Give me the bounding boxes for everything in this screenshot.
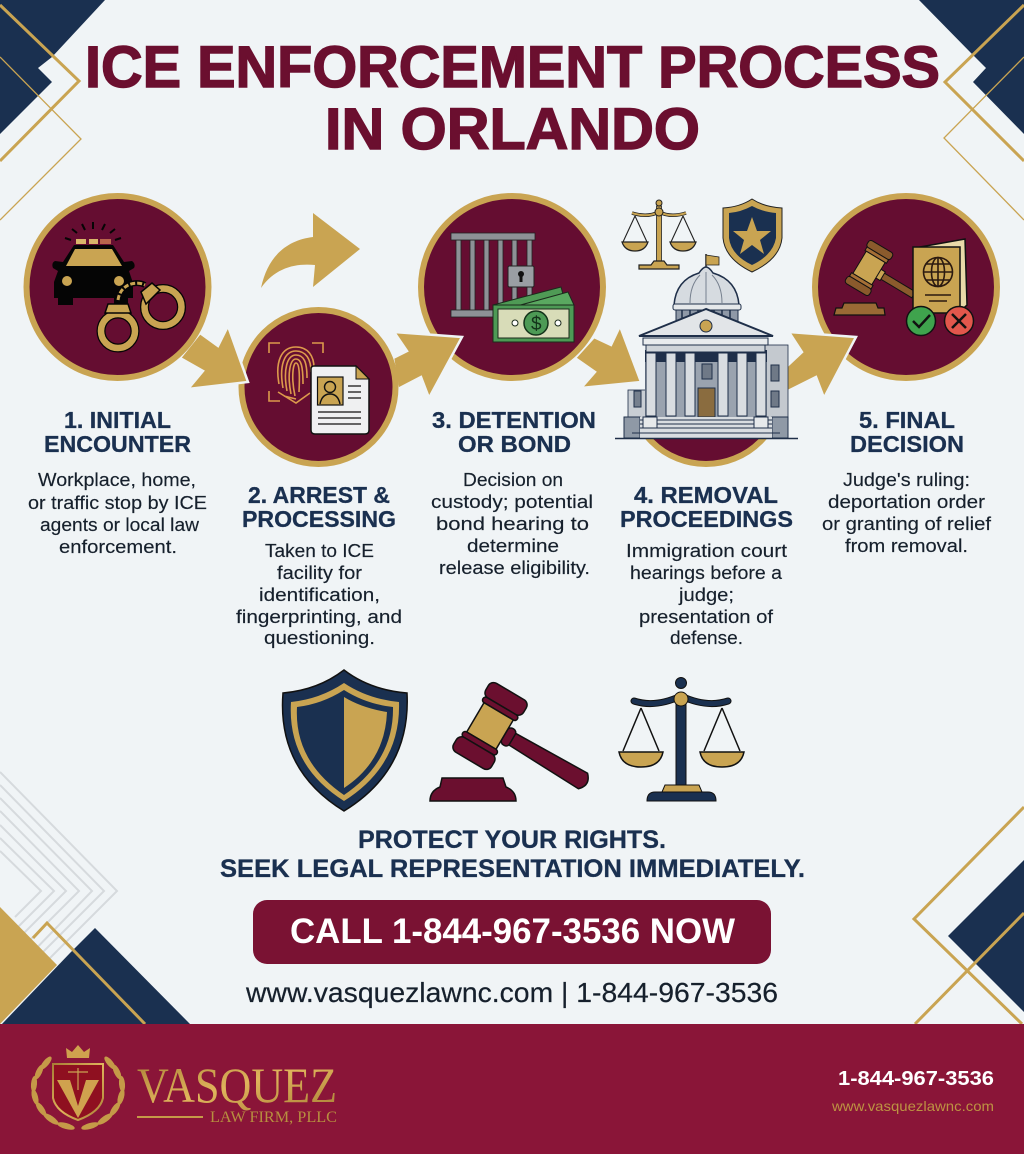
- icon: fingerprint: [269, 343, 323, 403]
- icon: x mark badge: [944, 306, 974, 336]
- step 4 text: Immigration court: [626, 540, 787, 561]
- step 2 text: questioning.: [264, 627, 375, 648]
- website and phone line: www.vasquezlawnc.com | 1-844-967-3536: [245, 977, 778, 1008]
- step 1 text: ENCOUNTER: [44, 431, 191, 457]
- step 5 text: Judge's ruling:: [843, 469, 970, 490]
- step 4 text: defense.: [670, 627, 743, 648]
- arrow: curved arrow above step 2: [261, 213, 360, 288]
- facade wall: [645, 350, 767, 418]
- call button: CALL 1-844-967-3536 NOW: [290, 912, 735, 951]
- title: ICE ENFORCEMENT PROCESS: [85, 35, 940, 100]
- step 4 text: [620, 482, 793, 648]
- step 5 text: from removal.: [845, 535, 968, 556]
- decoration: bottom-left corner: [0, 772, 190, 1024]
- step 5 text: [822, 407, 992, 556]
- icon: scales of justice, top: [622, 200, 696, 269]
- step 5 circle with gavel and passport icon: [815, 196, 997, 378]
- step 1 text: or traffic stop by ICE: [28, 492, 207, 513]
- step 3 text: Decision on: [463, 469, 563, 490]
- icon: large gavel: [430, 680, 607, 818]
- step 1 text: enforcement.: [59, 536, 177, 557]
- icon: identity document: [311, 366, 369, 434]
- icon: gavel: [844, 239, 926, 316]
- step 1 text: agents or local law: [40, 514, 200, 535]
- step 4 text: hearings before a: [630, 562, 783, 583]
- step 3 text: release eligibility.: [439, 557, 590, 578]
- step 2 text: identification,: [259, 584, 380, 605]
- icon: police car: [52, 222, 135, 305]
- step 4 text: 4. REMOVAL: [634, 482, 778, 508]
- gavel block: [430, 778, 516, 801]
- call-to-action heading: [220, 826, 805, 883]
- footer band: [0, 1024, 1024, 1154]
- decoration: bottom-right corner: [914, 807, 1024, 1024]
- step 2 text: Taken to ICE: [265, 540, 374, 561]
- arrow: step 2 to step 3: [393, 332, 462, 398]
- icon: money stack: [493, 287, 574, 342]
- step 3 text: OR BOND: [458, 431, 571, 457]
- step 4 text: presentation of: [639, 606, 774, 627]
- icon: large scales of justice: [619, 678, 744, 801]
- logo: wordmark: VASQUEZ: [137, 1057, 337, 1113]
- icon: passport: [913, 239, 967, 313]
- icon: courthouse: [615, 254, 798, 438]
- step 3 text: determine: [467, 535, 559, 556]
- step 1 text: [28, 407, 207, 557]
- footer contact: 1-844-967-3536: [838, 1068, 994, 1090]
- icon: star badge shield: [723, 199, 782, 272]
- step 3 text: [431, 407, 596, 578]
- columns: [646, 353, 766, 416]
- step 4 circle, lower arc visible under the courthouse: [645, 439, 767, 467]
- step 3 circle with jail and money icon: [421, 196, 603, 378]
- arrow: step 1 to step 2: [180, 326, 248, 389]
- call button: [253, 900, 771, 964]
- crown: [66, 1045, 90, 1058]
- logo: crest: [30, 1045, 126, 1131]
- step 5 text: DECISION: [850, 431, 964, 457]
- step 2 text: [236, 482, 402, 648]
- arrow: step 3 to step 4: [575, 326, 641, 388]
- step 3 text: custody; potential: [431, 491, 593, 512]
- icon: handcuffs: [101, 283, 182, 348]
- pediment: [639, 309, 773, 336]
- icon: padlock: [508, 266, 534, 287]
- footer contact: [831, 1068, 994, 1114]
- step 5 text: or granting of relief: [822, 513, 992, 534]
- step 5 text: deportation order: [828, 491, 985, 512]
- shield: [53, 1064, 103, 1120]
- footer contact: www.vasquezlawnc.com: [831, 1098, 994, 1114]
- flag: [705, 254, 707, 270]
- title: IN ORLANDO: [325, 97, 700, 162]
- step 2 text: fingerprinting, and: [236, 606, 402, 627]
- step 5 text: 5. FINAL: [859, 407, 955, 433]
- step 2 text: facility for: [277, 562, 362, 583]
- step 2 text: PROCESSING: [242, 506, 396, 532]
- step 1 text: Workplace, home,: [38, 469, 196, 490]
- decoration: top-left corner: [0, 0, 105, 220]
- call-to-action heading: PROTECT YOUR RIGHTS.: [358, 826, 666, 854]
- step 1 text: 1. INITIAL: [64, 407, 171, 433]
- logo: wordmark: LAW FIRM, PLLC: [210, 1109, 337, 1126]
- decoration: top-right corner: [919, 0, 1024, 220]
- dollar sign: $: [531, 314, 542, 335]
- icon: gavel block: [834, 303, 885, 315]
- call-to-action heading: SEEK LEGAL REPRESENTATION IMMEDIATELY.: [220, 855, 805, 883]
- title: [85, 35, 940, 162]
- step 4 text: PROCEEDINGS: [620, 506, 793, 532]
- step 2 circle with fingerprint and document icon: [242, 310, 396, 464]
- step 4 text: judge;: [678, 584, 734, 605]
- side wings: [628, 390, 648, 430]
- steps: [624, 417, 640, 438]
- step 3 text: 3. DETENTION: [432, 407, 596, 433]
- step 2 text: 2. ARREST &: [248, 482, 390, 508]
- step 1 circle with police car and handcuffs icon: [26, 196, 208, 378]
- arrow: step 4 to step 5: [785, 332, 856, 398]
- icon: check mark badge: [906, 306, 936, 336]
- step 3 text: bond hearing to: [436, 513, 589, 534]
- icon: jail bars: [451, 233, 535, 317]
- dome: [674, 267, 739, 305]
- icon: large shield: [283, 670, 407, 811]
- wreath: [30, 1055, 126, 1131]
